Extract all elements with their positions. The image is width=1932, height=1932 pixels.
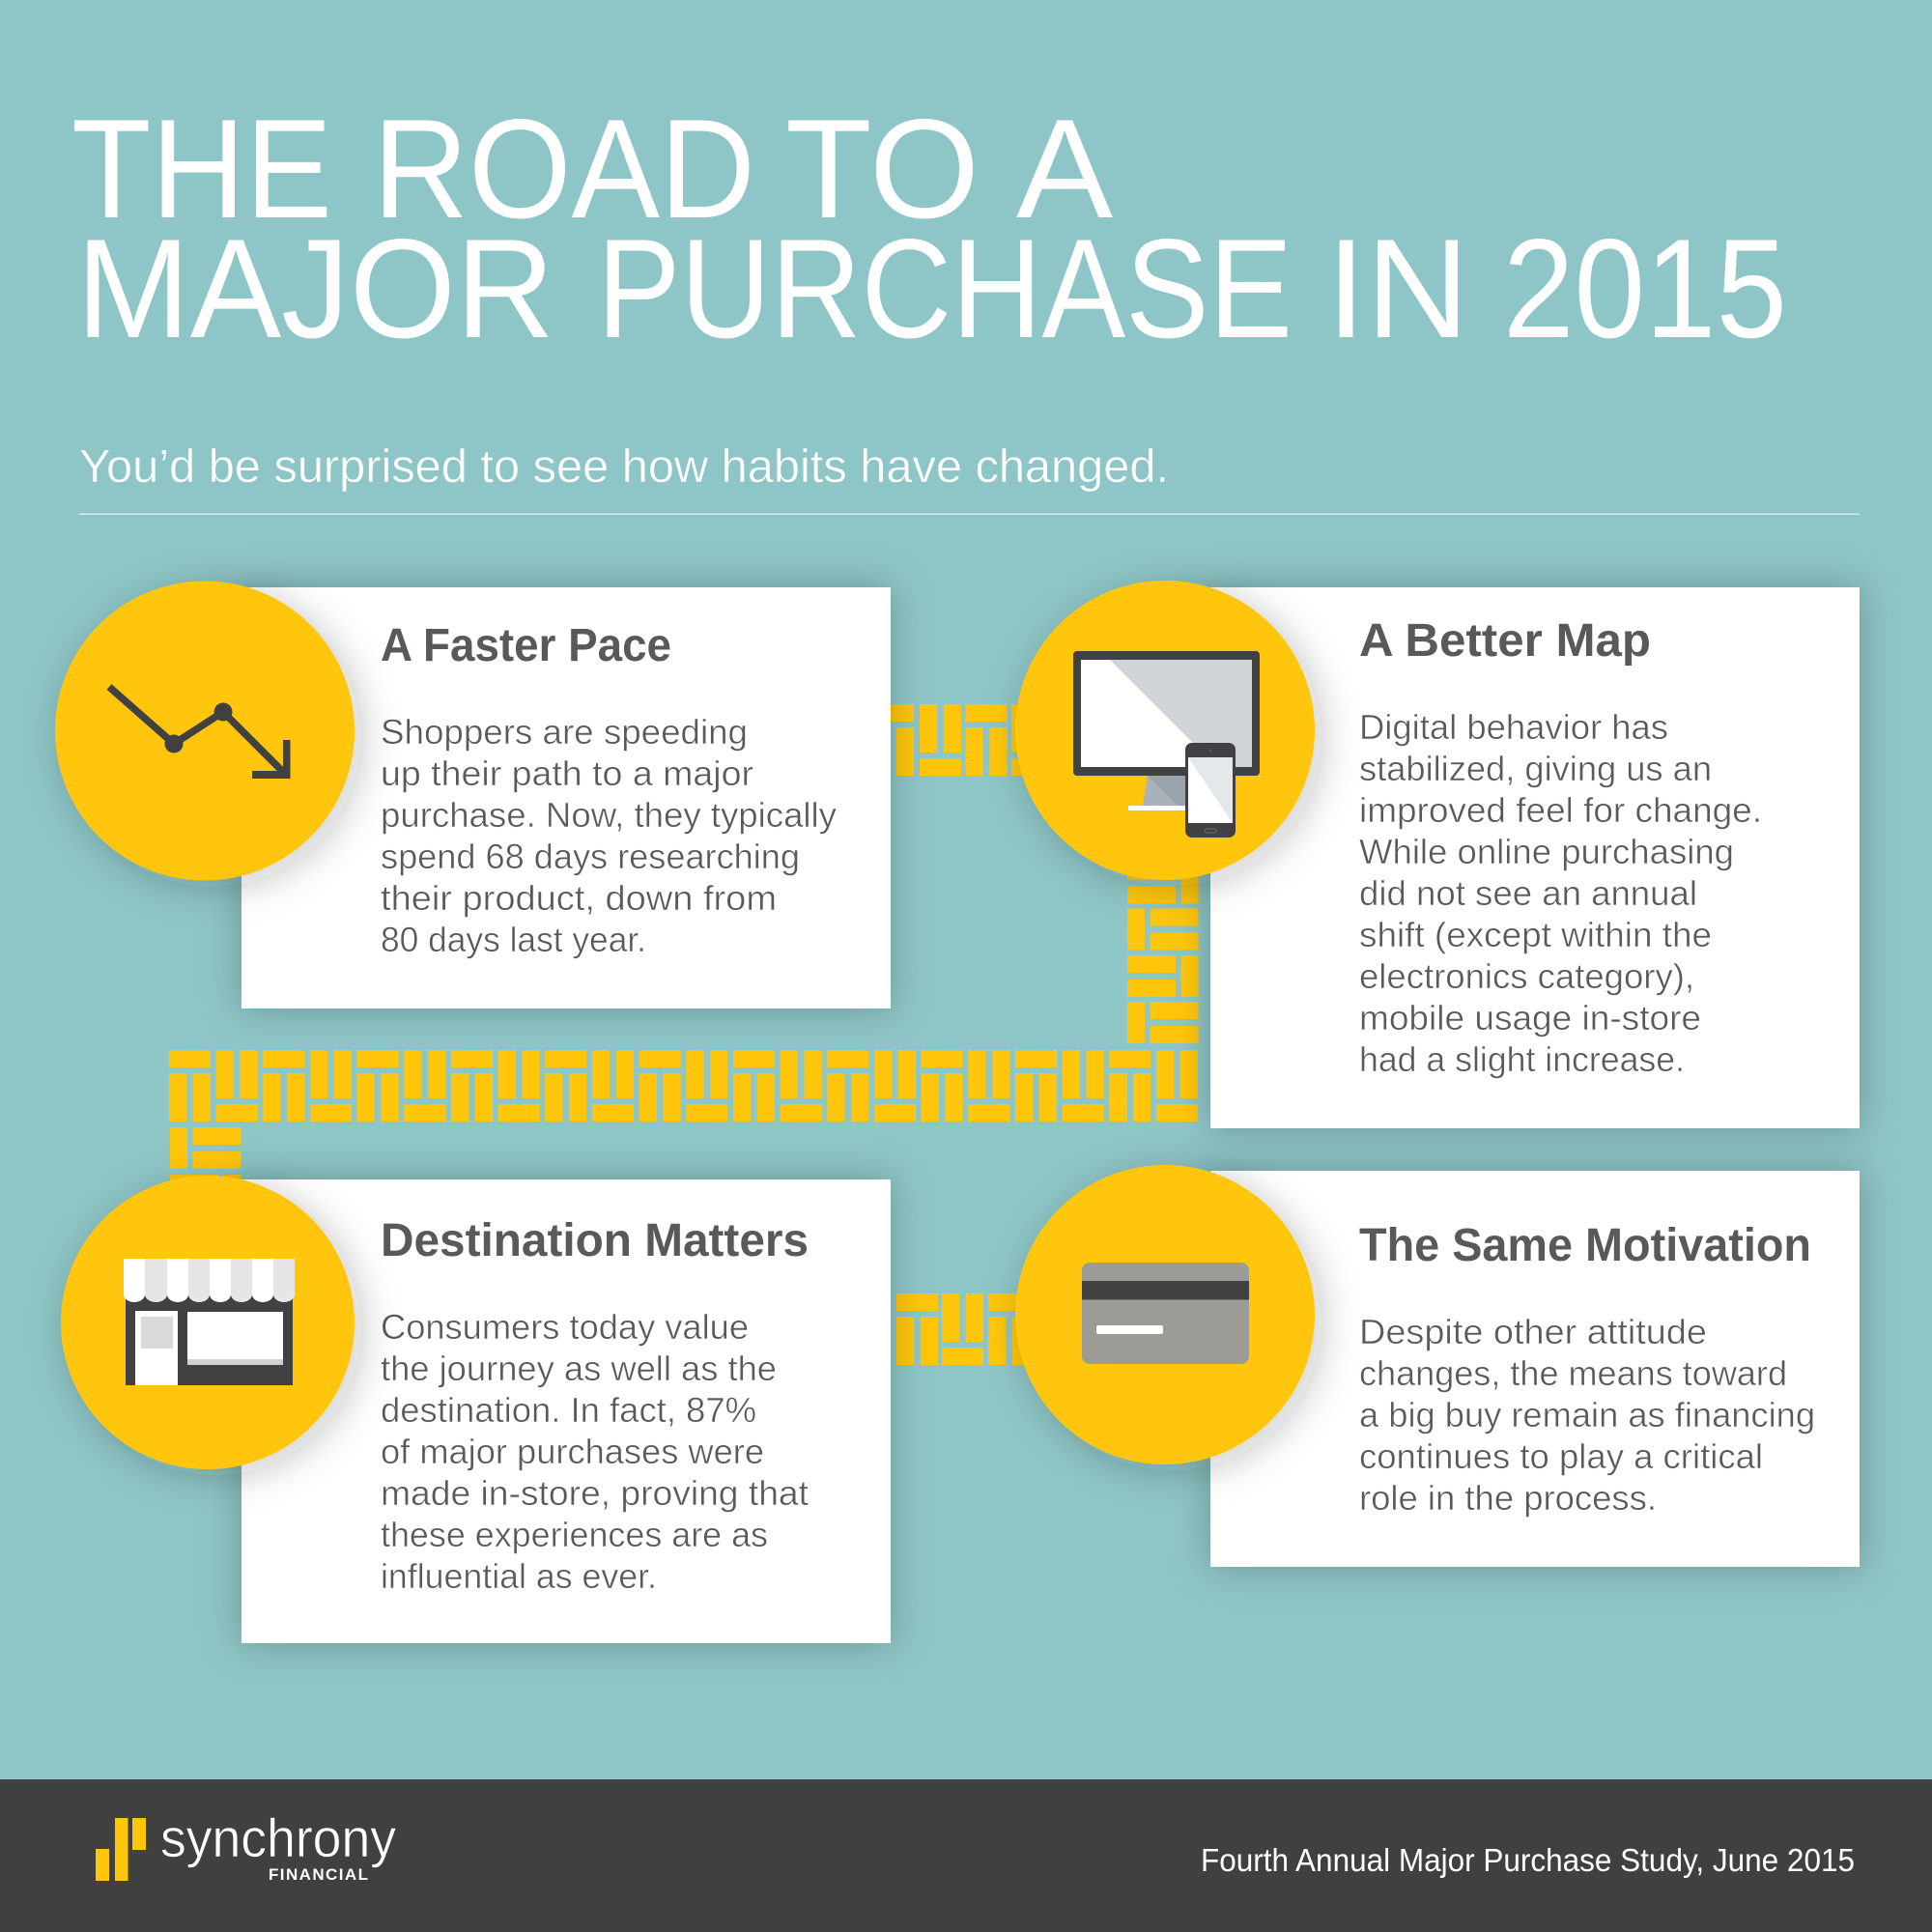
- logo: synchrony financial: synchrony: [160, 1807, 396, 1868]
- text block: destination matters: of major purchases were: [381, 1432, 764, 1471]
- heading: destination matters: Destination Matters: [381, 1215, 809, 1266]
- panel: a faster pace: [242, 587, 891, 1009]
- text block: destination matters: Consumers today value: [381, 1307, 749, 1347]
- text block: a faster pace: up their path to a major: [381, 753, 753, 793]
- icon: storefront: [61, 1176, 355, 1469]
- text block: a better map: shift (except within the: [1359, 915, 1712, 954]
- subtitle: You’d be surprised to see how habits have changed.: [79, 441, 1169, 493]
- title: PURCHASE: [597, 210, 1293, 367]
- icon: credit card: [1015, 1165, 1315, 1464]
- text block: a faster pace: their product, down from: [381, 878, 777, 918]
- text block: a faster pace: purchase. Now, they typically: [381, 795, 837, 835]
- title: 2015: [1503, 210, 1787, 367]
- text block: a better map: mobile usage in-store: [1359, 998, 1701, 1037]
- text block: a better map: stabilized, giving us an: [1359, 749, 1712, 788]
- text block: a better map: did not see an annual: [1359, 873, 1697, 913]
- title: IN: [1326, 210, 1469, 367]
- panel: destination matters: [242, 1179, 891, 1643]
- heading: the same motivation: The Same Motivation: [1359, 1220, 1811, 1271]
- text block: the same motivation: a big buy remain as financing: [1359, 1395, 1815, 1435]
- title: ROAD: [373, 90, 755, 247]
- title: TO: [785, 90, 980, 247]
- heading: a faster pace: A Faster Pace: [381, 620, 671, 671]
- footer: [0, 1779, 1932, 1932]
- text block: a better map: improved feel for change.: [1359, 790, 1762, 830]
- title: THE: [71, 90, 332, 247]
- text block: destination matters: influential as ever.: [381, 1556, 657, 1596]
- road path: [169, 704, 1198, 1365]
- text block: a better map: While online purchasing: [1359, 832, 1734, 871]
- title: [71, 90, 1787, 367]
- text block: a better map: Digital behavior has: [1359, 707, 1668, 747]
- text block: destination matters: made in-store, proving that: [381, 1473, 809, 1513]
- text block: destination matters: [381, 1307, 809, 1596]
- title: MAJOR: [76, 210, 554, 367]
- title: A: [1016, 90, 1114, 247]
- text block: the same motivation: changes, the means toward: [1359, 1353, 1787, 1393]
- icon: desktop monitor and phone: [1015, 581, 1315, 880]
- text block: a faster pace: Shoppers are speeding: [381, 712, 748, 752]
- text block: the same motivation: continues to play a critical: [1359, 1436, 1763, 1476]
- text block: a faster pace: spend 68 days researching: [381, 837, 800, 876]
- logo: synchrony financial: [96, 1807, 396, 1884]
- icon: falling line chart: [55, 582, 355, 881]
- source note: Fourth Annual Major Purchase Study, June 2015: [1201, 1842, 1855, 1878]
- text block: a faster pace: 80 days last year.: [381, 920, 646, 959]
- panel: a better map: [1210, 587, 1860, 1128]
- heading: a better map: A Better Map: [1359, 615, 1651, 667]
- text block: destination matters: the journey as well as the: [381, 1349, 777, 1388]
- text block: a better map: [1359, 707, 1762, 1079]
- text block: the same motivation: Despite other attitude: [1359, 1312, 1707, 1351]
- text block: destination matters: these experiences are as: [381, 1515, 768, 1554]
- logo: synchrony financial: FINANCIAL: [269, 1865, 368, 1884]
- text block: a better map: electronics category),: [1359, 956, 1694, 996]
- text block: a better map: had a slight increase.: [1359, 1039, 1685, 1079]
- panel: the same motivation: [1210, 1171, 1860, 1567]
- text block: the same motivation: role in the process.: [1359, 1478, 1657, 1518]
- text block: a faster pace: [381, 712, 837, 959]
- text block: the same motivation: [1359, 1312, 1815, 1518]
- text block: destination matters: destination. In fact, 87%: [381, 1390, 756, 1430]
